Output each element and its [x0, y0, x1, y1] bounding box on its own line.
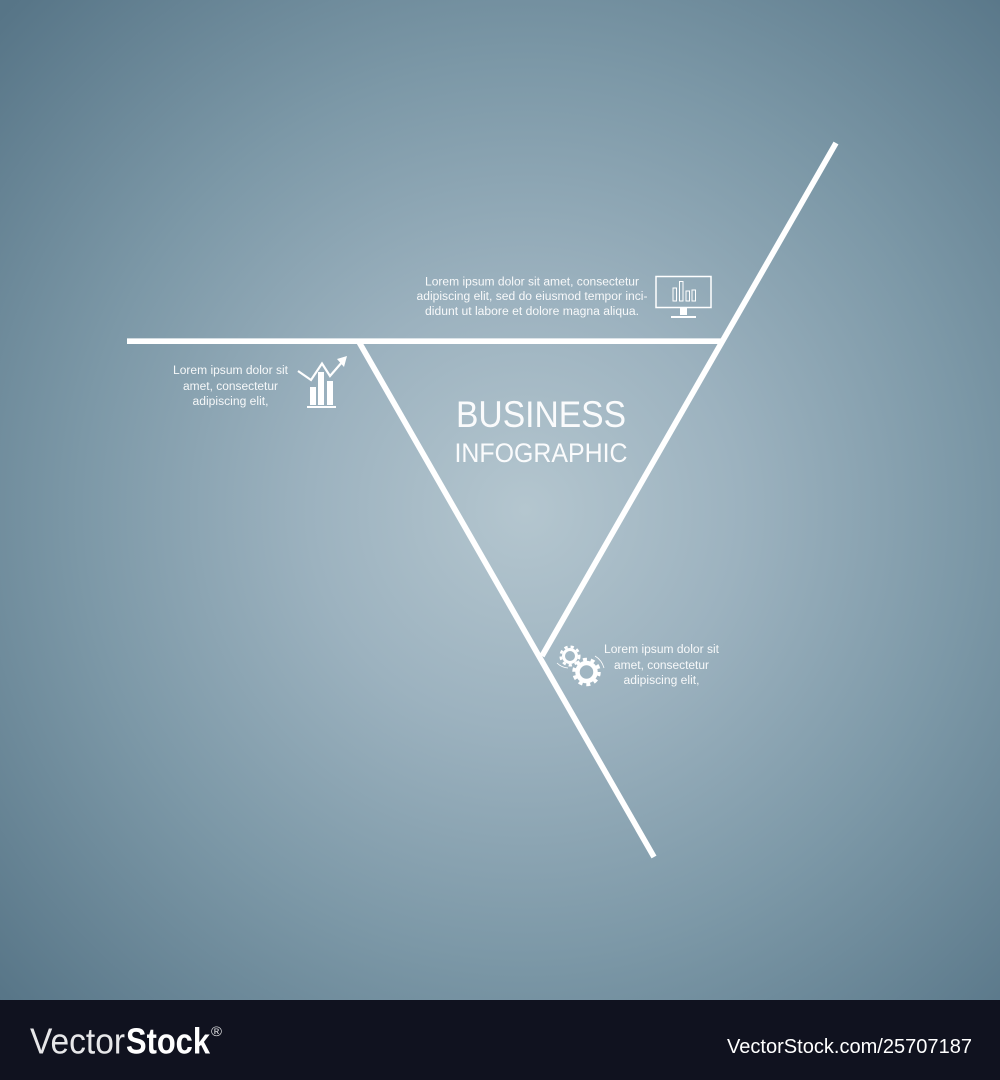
- footer bar: [0, 1000, 1000, 1080]
- text block: left: Lorem ipsum dolor sit: [173, 365, 289, 377]
- rotation arcs: [557, 656, 604, 668]
- text block: left: amet, consectetur: [183, 381, 278, 393]
- footer url: VectorStock.com/25707187: [727, 1036, 972, 1058]
- title: BUSINESS: [456, 394, 626, 435]
- small gear: [561, 647, 579, 665]
- title: INFOGRAPHIC: [454, 438, 628, 468]
- text block: left: adipiscing elit,: [192, 396, 268, 408]
- text block: right: adipiscing elit,: [624, 675, 700, 687]
- text block: right: [604, 644, 720, 687]
- text block: right: Lorem ipsum dolor sit: [604, 644, 720, 656]
- footer logo: Stock: [126, 1020, 211, 1062]
- footer logo: [30, 1020, 223, 1062]
- text block: left: [173, 365, 289, 408]
- footer logo: ®: [211, 1023, 223, 1039]
- large gear: [574, 660, 599, 684]
- text block: top: Lorem ipsum dolor sit amet, consectetur: [425, 276, 639, 288]
- title: [454, 394, 628, 468]
- text block: top: [416, 276, 648, 318]
- text block: right: amet, consectetur: [614, 660, 709, 672]
- icon: growth chart with arrow: [298, 356, 347, 408]
- icon: monitor with bar chart: [656, 276, 711, 318]
- text block: top: didunt ut labore et dolore magna aliqua.: [425, 306, 639, 318]
- icon: gears: [557, 647, 604, 684]
- triangle line frame: [127, 143, 836, 857]
- footer logo: Vector: [30, 1020, 125, 1062]
- text block: top: adipiscing elit, sed do eiusmod tempor inci-: [416, 291, 648, 303]
